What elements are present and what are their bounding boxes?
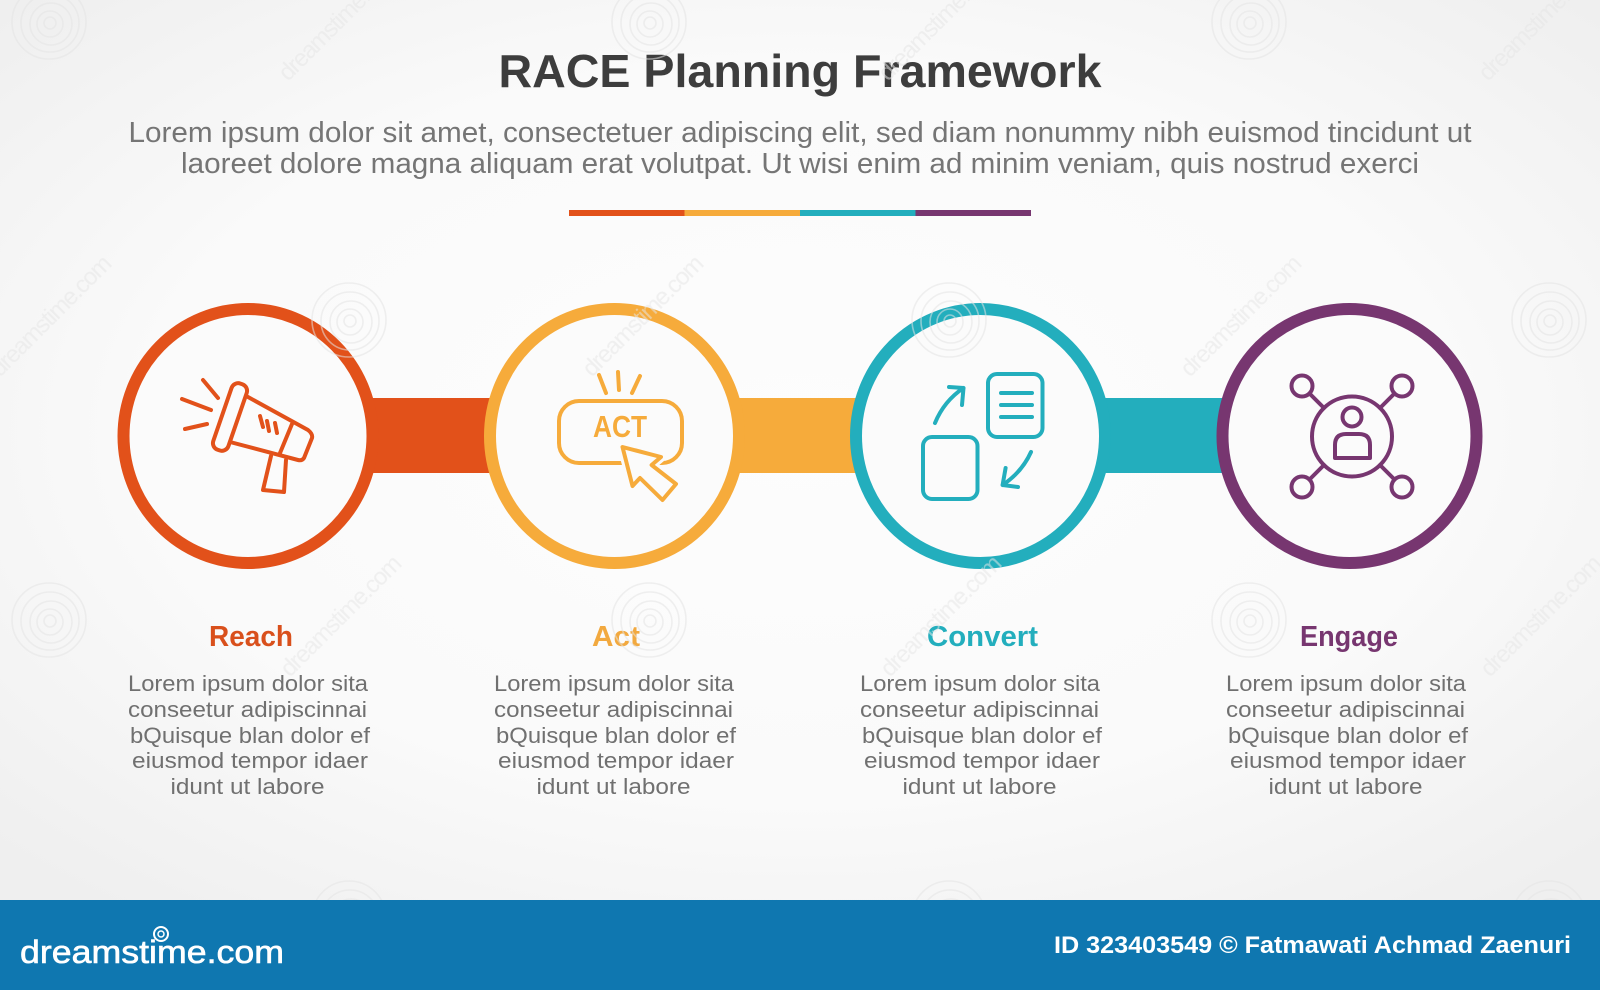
footer bar bbox=[0, 900, 1600, 990]
panel: engage bbox=[1222, 309, 1476, 799]
panel: convert bbox=[856, 309, 1105, 799]
watermarks: dreamstime.com bbox=[275, 550, 407, 682]
subtitle bbox=[128, 117, 1472, 180]
engage circle bbox=[1222, 309, 1476, 563]
description: reach: Lorem ipsum dolor sita bbox=[128, 671, 369, 696]
subtitle: Lorem ipsum dolor sit amet, consectetuer adipiscing elit, sed diam nonummy nibh euismod tincidunt ut bbox=[128, 117, 1472, 149]
description: act: eiusmod tempor idaer bbox=[498, 748, 735, 773]
description: engage: eiusmod tempor idaer bbox=[1230, 748, 1467, 773]
description: reach: eiusmod tempor idaer bbox=[132, 748, 369, 773]
watermarks: dreamstime.com bbox=[875, 550, 1007, 682]
description: convert: idunt ut labore bbox=[902, 774, 1056, 799]
description: engage: idunt ut labore bbox=[1268, 774, 1422, 799]
description: convert: bQuisque blan dolor ef bbox=[862, 723, 1103, 748]
description: reach: bQuisque blan dolor ef bbox=[130, 723, 371, 748]
title: RACE Planning Framework bbox=[498, 45, 1102, 97]
label: convert: Convert bbox=[927, 621, 1038, 653]
watermarks: dreamstime.com bbox=[1175, 250, 1307, 382]
convert circle bbox=[856, 309, 1105, 563]
colored divider bbox=[569, 210, 1031, 216]
icon: document exchange bbox=[923, 374, 1042, 499]
description: act: conseetur adipiscinnai bbox=[494, 697, 733, 722]
description: act bbox=[494, 671, 737, 799]
act circle bbox=[490, 309, 739, 563]
footer credit: ID 323403549 © Fatmawati Achmad Zaenuri bbox=[1054, 932, 1571, 959]
panel: reach bbox=[124, 309, 372, 799]
panel: act bbox=[490, 309, 739, 799]
reach circle bbox=[124, 309, 372, 563]
description: act: Lorem ipsum dolor sita bbox=[494, 671, 735, 696]
description: engage bbox=[1226, 671, 1469, 799]
description: engage: Lorem ipsum dolor sita bbox=[1226, 671, 1467, 696]
description: reach: conseetur adipiscinnai bbox=[128, 697, 367, 722]
watermarks: dreamstime.com bbox=[577, 250, 709, 382]
description: convert bbox=[860, 671, 1103, 799]
description: act: bQuisque blan dolor ef bbox=[496, 723, 737, 748]
description: convert: Lorem ipsum dolor sita bbox=[860, 671, 1101, 696]
description: convert: conseetur adipiscinnai bbox=[860, 697, 1099, 722]
label: engage: Engage bbox=[1300, 621, 1398, 653]
connector bands bbox=[360, 398, 1232, 473]
footer logo: dreamstime.com bbox=[20, 934, 284, 970]
icon: user network bbox=[1292, 376, 1412, 498]
label: reach: Reach bbox=[209, 621, 293, 653]
description: reach: idunt ut labore bbox=[170, 774, 324, 799]
description: convert: eiusmod tempor idaer bbox=[864, 748, 1101, 773]
icon: act button with cursor bbox=[559, 372, 682, 500]
icon: act button with cursor: ACT bbox=[593, 409, 647, 444]
subtitle: laoreet dolore magna aliquam erat volutpat. Ut wisi enim ad minim veniam, quis nostrud exerci bbox=[181, 148, 1419, 180]
icon: megaphone bbox=[182, 380, 312, 492]
description: engage: conseetur adipiscinnai bbox=[1226, 697, 1465, 722]
description: act: idunt ut labore bbox=[536, 774, 690, 799]
description: engage: bQuisque blan dolor ef bbox=[1228, 723, 1469, 748]
label: act: Act bbox=[592, 621, 640, 653]
description: reach bbox=[128, 671, 371, 799]
